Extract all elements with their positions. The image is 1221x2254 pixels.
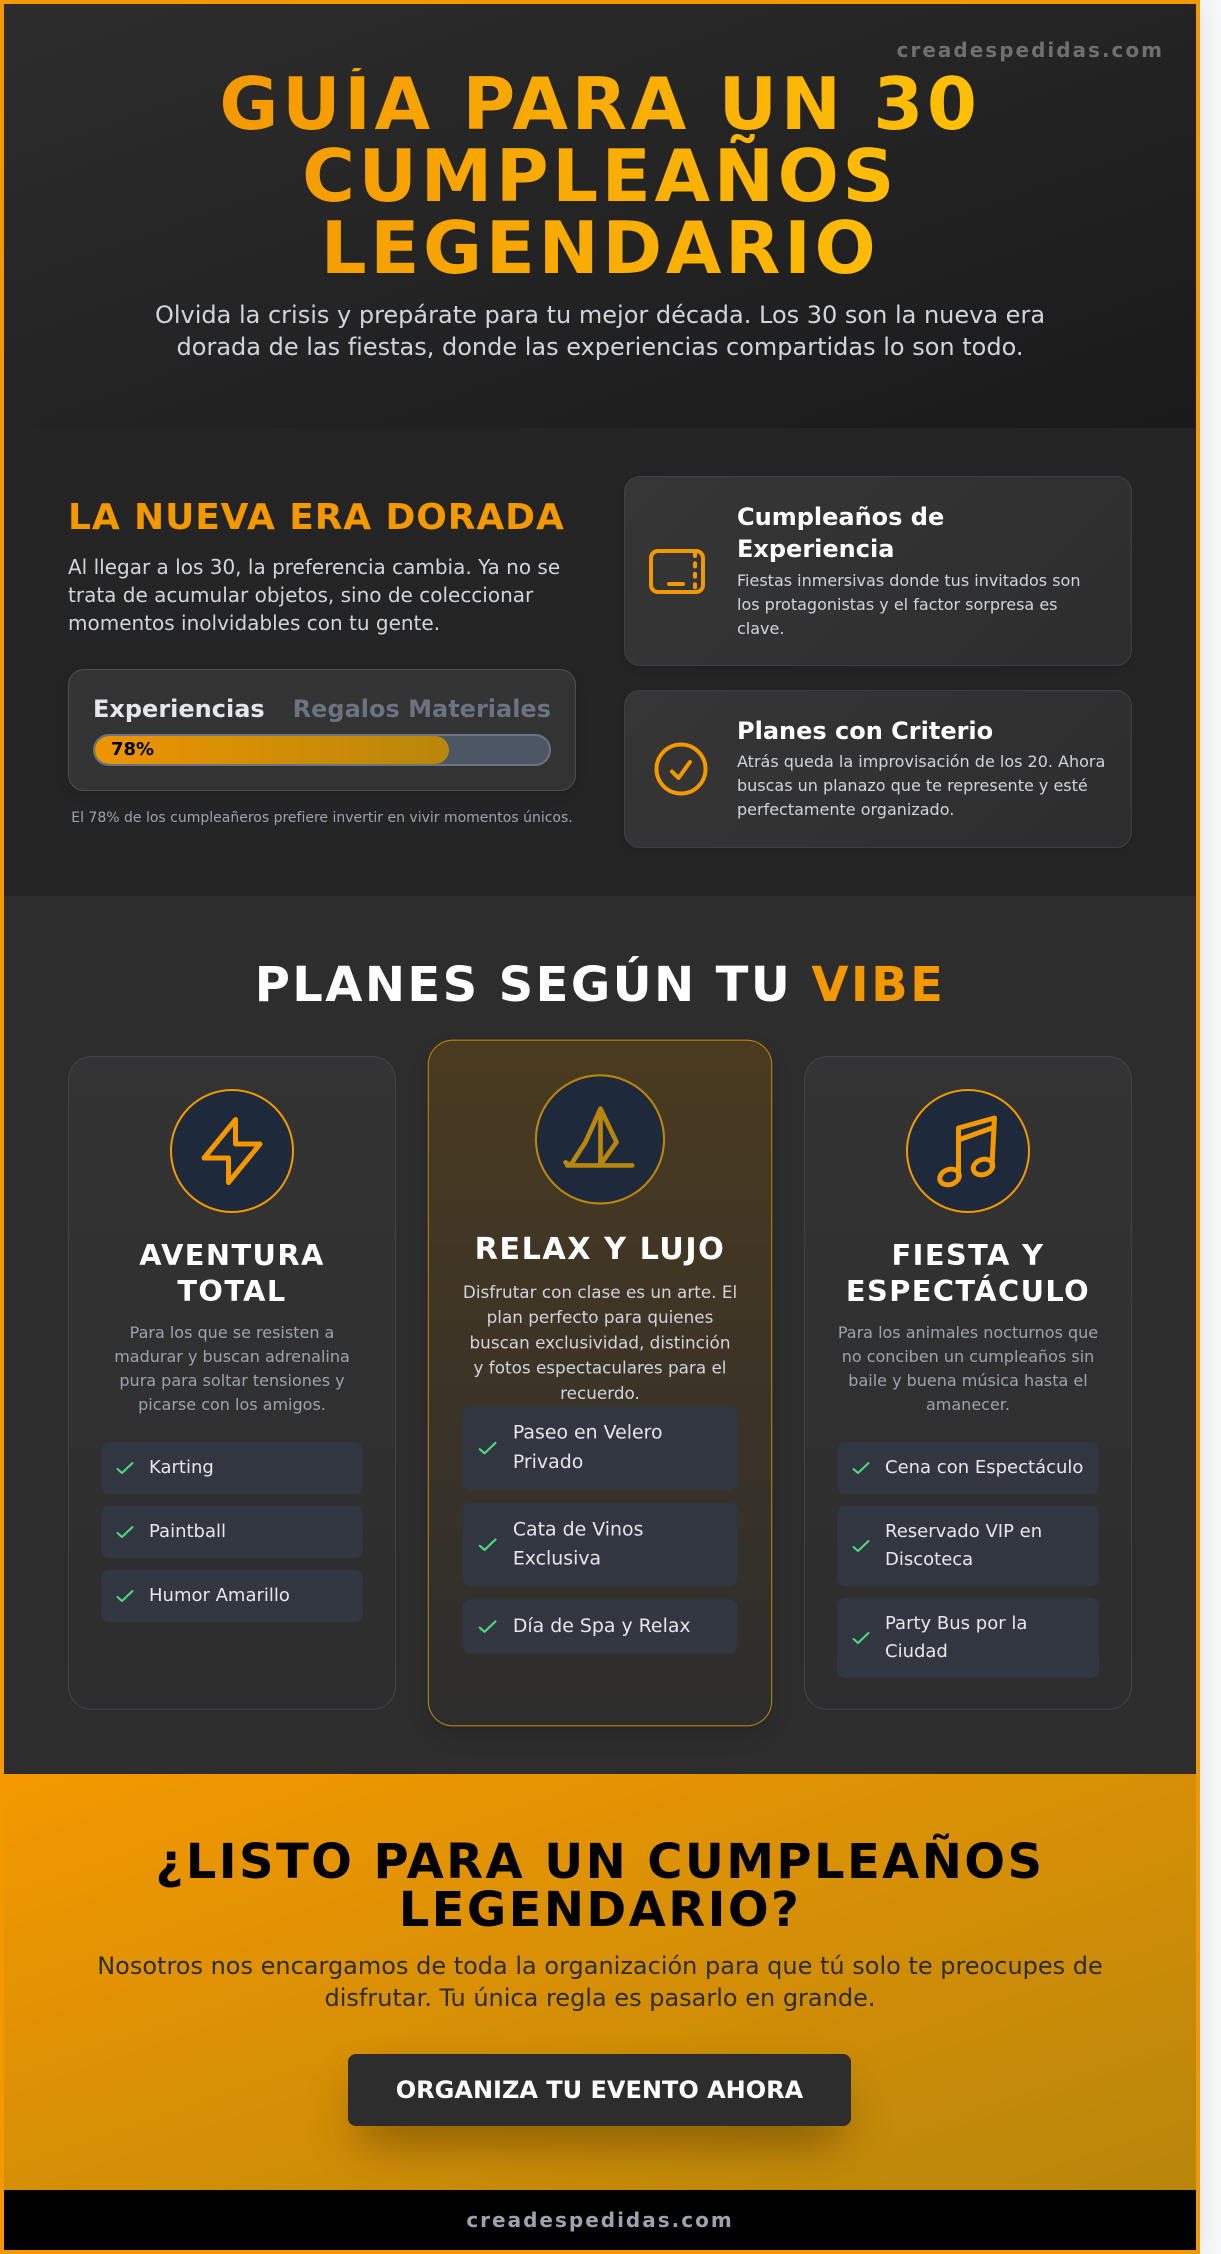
list item [837,1598,1099,1678]
panel: planes según tu vibe [0,896,1200,1774]
card: planes con criterio [624,690,1132,848]
section heading: PLANES SEGÚN TU VIBE [255,957,945,1013]
label: experiencias: Experiencias [93,695,265,723]
cta text: disfrutar. Tu única regla es pasarlo en grande. [325,1984,875,2012]
list item [101,1570,363,1622]
card text: clave. [737,619,784,638]
list item: Privado [513,1451,583,1473]
list item: Humor Amarillo [149,1584,290,1606]
card text: baile y buena música hasta el [848,1371,1088,1390]
card title: TOTAL [177,1274,287,1308]
list item: Día de Spa y Relax [513,1615,691,1637]
card text: no conciben un cumpleaños sin [842,1347,1094,1366]
list item [462,1502,738,1586]
title [100,68,1100,284]
intro text: Al llegar a los 30, la preferencia cambia. Ya no se [68,555,560,579]
icon: ticket [649,549,705,594]
list item: Discoteca [885,1548,973,1570]
footer [0,2190,1200,2254]
card text: Para los animales nocturnos que [838,1323,1098,1342]
card text: Fiestas inmersivas donde tus invitados son [737,571,1080,590]
card: relax y lujo [428,1040,772,1726]
card text: Atrás queda la improvisación de los 20. Ahora [737,752,1105,771]
card title: AVENTURA [139,1238,325,1272]
card title [139,1238,325,1308]
heading: LA NUEVA ERA DORADA [68,497,565,538]
card: fiesta y espectáculo [804,1056,1132,1710]
list item: Cata de Vinos [513,1518,643,1540]
card title [846,1238,1090,1308]
card text: amanecer. [926,1395,1010,1414]
intro text: trata de acumular objetos, sino de coleccionar [68,583,533,607]
card: aventura total [68,1056,396,1710]
icon: music notes [906,1089,1030,1213]
intro text [68,555,560,635]
progress bar [93,734,551,766]
card title: Experiencia [737,535,894,563]
subtitle [155,301,1045,361]
comparison bar box [68,669,576,791]
icon: lightning bolt [170,1089,294,1213]
icon: check circle [654,742,708,796]
panel: header [0,0,1200,428]
card text [463,1282,737,1403]
list item: Party Bus por la [885,1612,1027,1634]
cta button: ORGANIZA TU EVENTO AHORA [396,2076,803,2104]
list item [462,1599,738,1653]
card text: plan perfecto para quienes [487,1307,713,1327]
list item [101,1442,363,1494]
card title [737,503,944,563]
list item [462,1406,738,1490]
card text: perfectamente organizado. [737,800,954,819]
card text: buscan exclusividad, distinción [470,1333,730,1353]
plan list [462,1406,738,1654]
list item: Reservado VIP en [885,1520,1042,1542]
cta heading: ¿LISTO PARA UN CUMPLEAÑOS [156,1834,1044,1890]
title: CUMPLEAÑOS [302,134,898,218]
card title: Planes con Criterio [737,717,993,745]
watermark: creadespedidas.com [897,38,1164,62]
title: GUÍA PARA UN 30 [219,62,981,146]
cta heading [156,1834,1044,1938]
card text [838,1323,1098,1414]
card text: los protagonistas y el factor sorpresa es [737,595,1058,614]
list item: Exclusiva [513,1547,601,1569]
card text: Disfrutar con clase es un arte. El [463,1282,737,1302]
plan list [837,1442,1099,1678]
card text [737,571,1080,638]
bar caption: El 78% de los cumpleañeros prefiere invertir en vivir momentos únicos. [71,810,573,826]
card: cumpleaños de experiencia [624,476,1132,666]
bar fill 78% [95,736,449,764]
card text: buscas un planazo que te represente y esté [737,776,1088,795]
cta text [97,1952,1103,2012]
list item: Paintball [149,1520,226,1542]
list item: Ciudad [885,1640,948,1662]
card title: Cumpleaños de [737,503,944,531]
subtitle: dorada de las fiestas, donde las experiencias compartidas lo son todo. [177,333,1023,361]
card text: y fotos espectaculares para el [474,1358,726,1378]
card text: Para los que se resisten a [130,1323,334,1342]
panel: la nueva era dorada [0,428,1200,896]
card text: picarse con los amigos. [138,1395,326,1414]
card text: recuerdo. [560,1383,640,1403]
panel: call to action [0,1774,1200,2190]
plan list [101,1442,363,1622]
bar fill 78%: 78% [111,739,154,760]
card text [737,752,1105,819]
card title: ESPECTÁCULO [846,1274,1090,1308]
cta text: Nosotros nos encargamos de toda la organización para que tú solo te preocupes de [97,1952,1103,1980]
card title: FIESTA Y [892,1238,1044,1272]
cta heading: LEGENDARIO? [399,1882,801,1938]
card text: pura para soltar tensiones y [119,1371,345,1390]
list item [837,1506,1099,1586]
list item [101,1506,363,1558]
card text [114,1323,350,1414]
list item: Karting [149,1456,214,1478]
icon: sailboat [535,1074,665,1205]
label: regalos materiales: Regalos Materiales [293,695,551,723]
title: LEGENDARIO [321,206,879,290]
intro text: momentos inolvidables con tu gente. [68,611,440,635]
cta button [348,2054,851,2126]
footer site name: creadespedidas.com [466,2208,734,2232]
list item: Paseo en Velero [513,1421,663,1443]
list item [837,1442,1099,1494]
list item: Cena con Espectáculo [885,1456,1083,1478]
subtitle: Olvida la crisis y prepárate para tu mejor década. Los 30 son la nueva era [155,301,1045,329]
card text: madurar y buscan adrenalina [114,1347,350,1366]
card title: RELAX Y LUJO [475,1231,725,1266]
